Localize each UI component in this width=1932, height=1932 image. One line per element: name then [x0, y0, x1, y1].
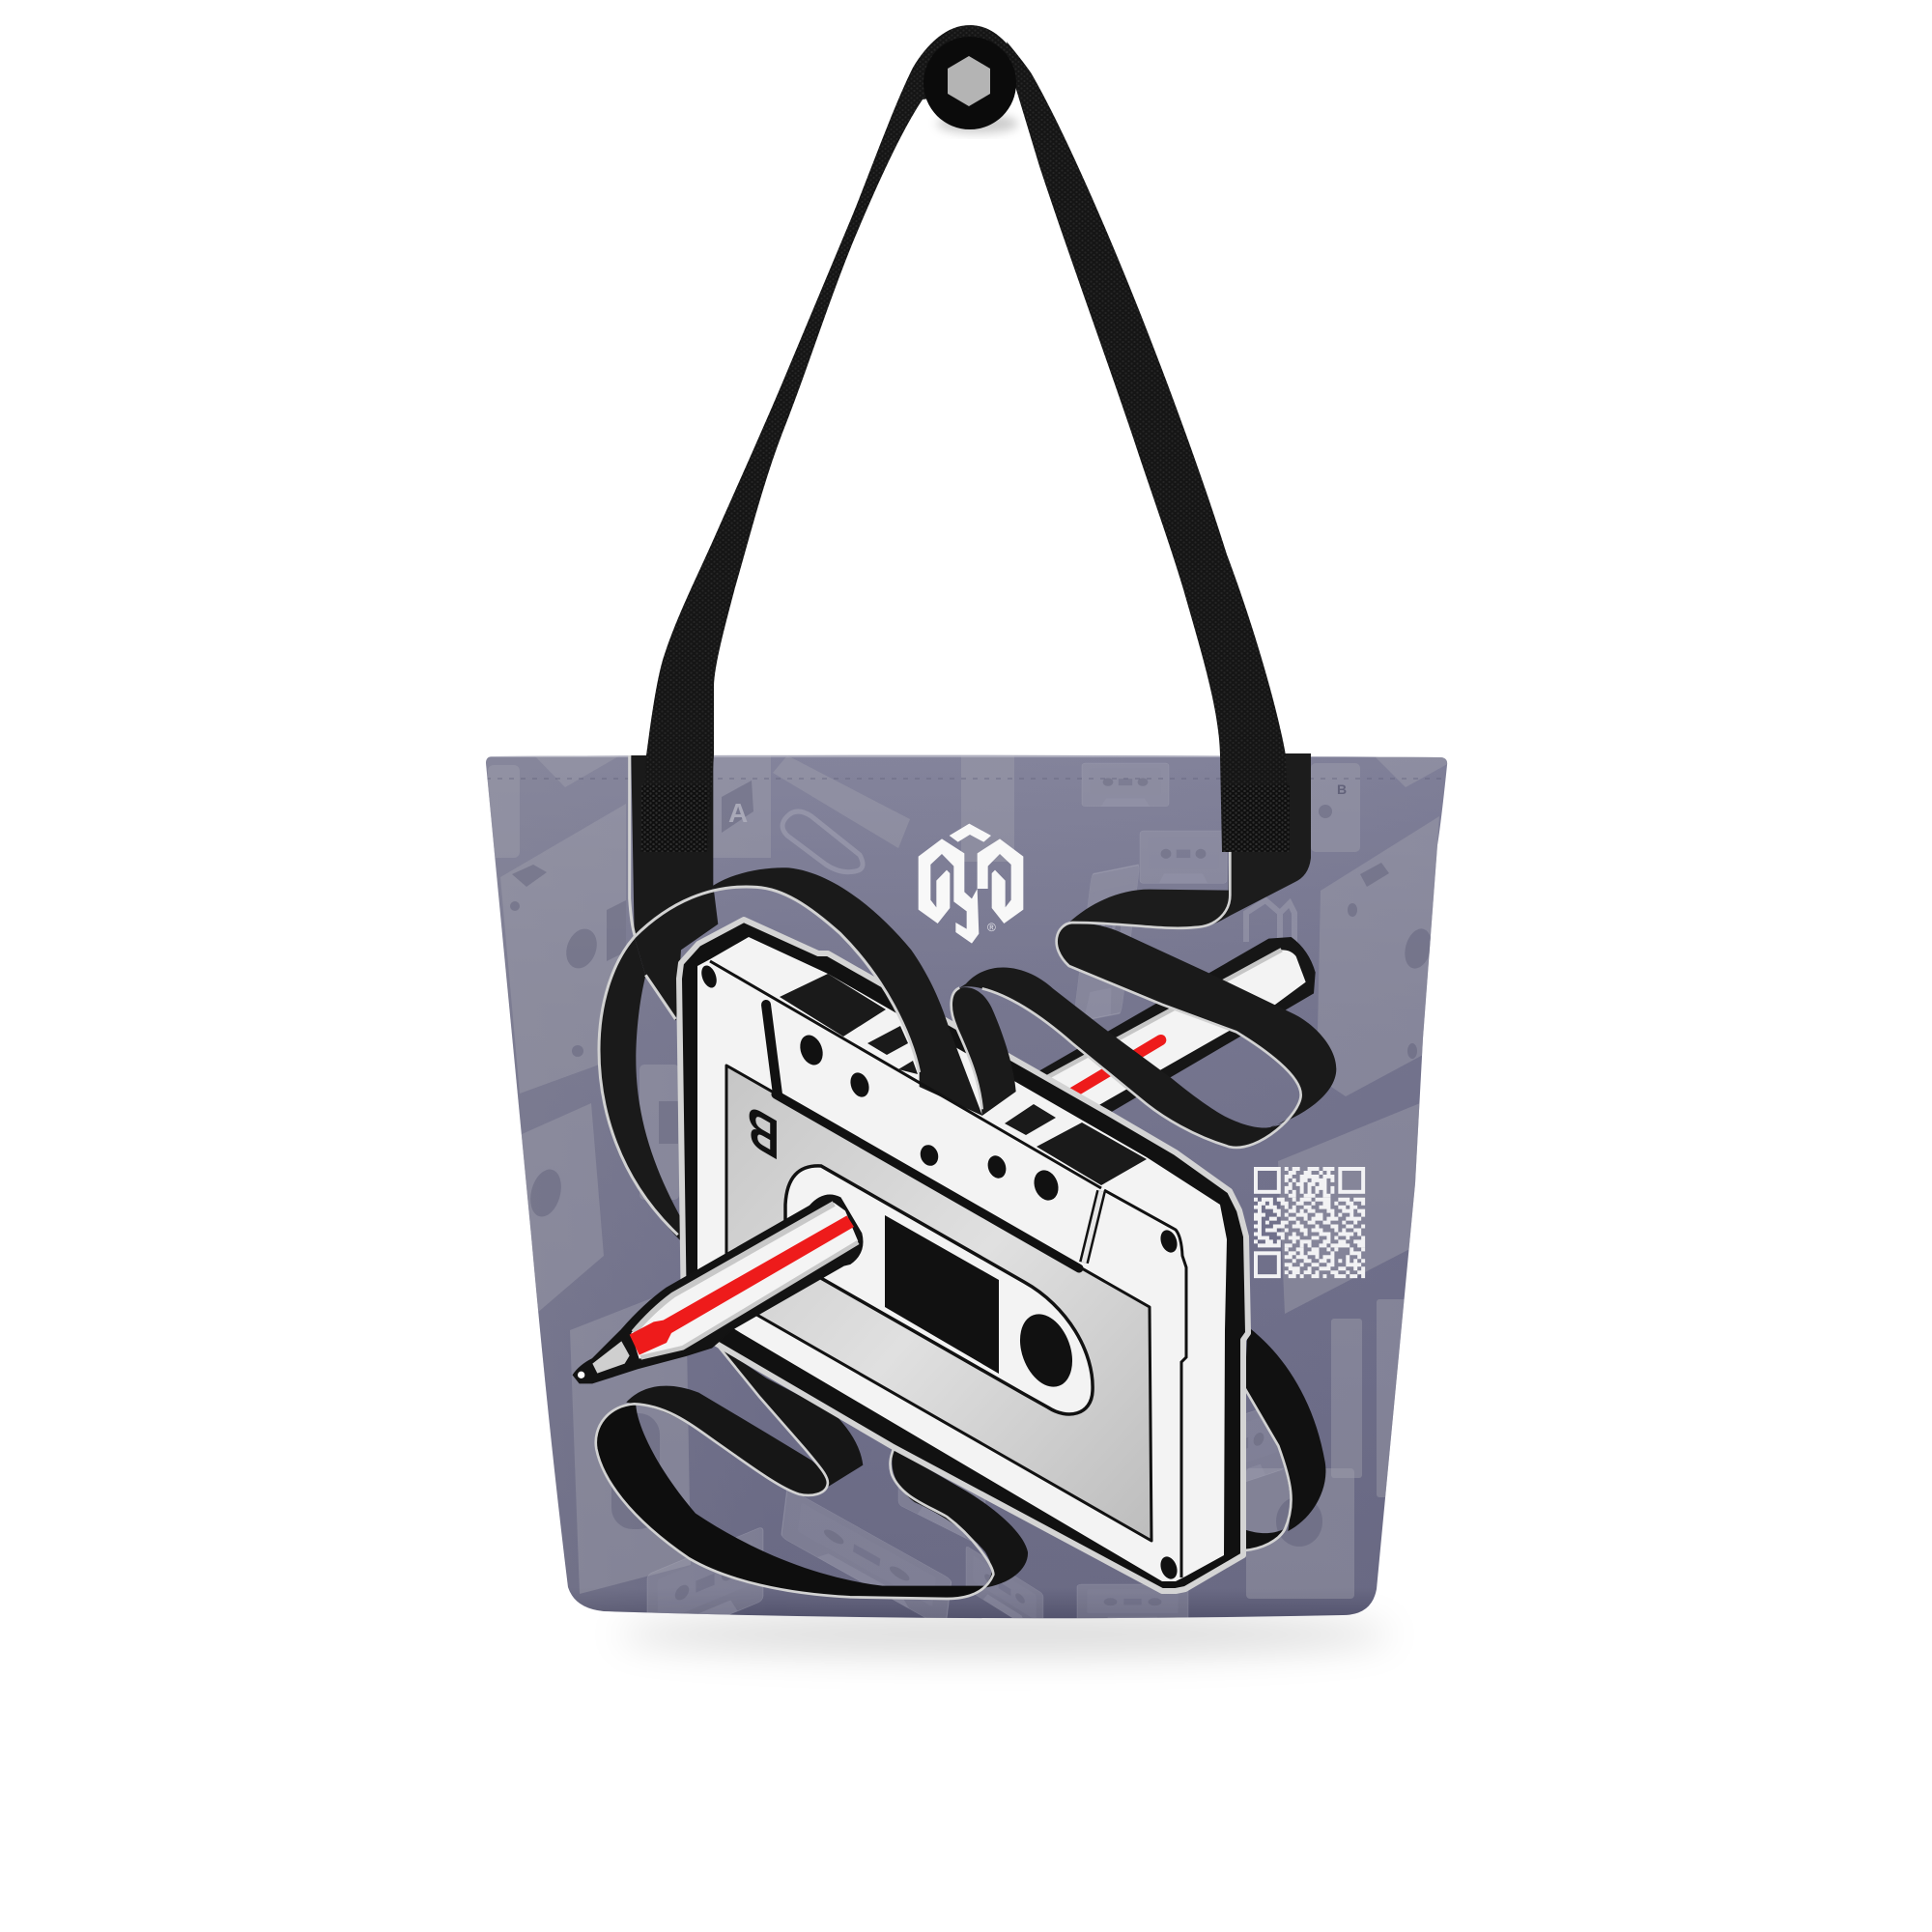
bag drop shadow: [618, 1613, 1391, 1656]
tape: right loop behind cassette: [1244, 1326, 1325, 1550]
brand logo: [919, 824, 1023, 944]
top seam: [486, 778, 1447, 780]
tape: lower left loops: [596, 1346, 1028, 1599]
strap stitching right: [1223, 784, 1290, 852]
brand logo: ®: [987, 921, 996, 934]
cassette outline: [679, 920, 1248, 1591]
lid holes and screws: [698, 963, 1180, 1581]
pencil: front section: [573, 1195, 863, 1383]
ghost letter A: A: [728, 798, 748, 828]
QR code: [1254, 1169, 1365, 1276]
left strap: [640, 25, 1016, 852]
hanging pin: [923, 37, 1016, 129]
ghost stadium: [782, 811, 863, 872]
pin shadow: [937, 114, 1018, 133]
ghost logo: [1246, 900, 1294, 942]
ghost letter B: B: [1337, 781, 1347, 797]
letter B: B: [747, 1092, 780, 1174]
pattern: ghost cassettes: [488, 755, 1449, 1649]
reel hole: [1010, 1307, 1082, 1394]
tote bag body: [473, 749, 1459, 1649]
tape entering cassette: [599, 867, 982, 1235]
right strap: [1007, 42, 1290, 852]
gray label panel: [726, 1065, 1151, 1541]
lid lines: [710, 961, 1186, 1577]
tape: upper right twist: [959, 753, 1336, 1148]
cassette body: [697, 937, 1227, 1581]
tape: left strip and left arch (behind cassette): [599, 755, 718, 1243]
strap stitching left: [641, 784, 707, 852]
reel window: [785, 1166, 1093, 1414]
head slots on top edge: [780, 974, 1147, 1185]
pencil: rear section: [1037, 937, 1316, 1114]
cassette tape: [599, 867, 1248, 1591]
black tape window: [885, 1215, 999, 1374]
